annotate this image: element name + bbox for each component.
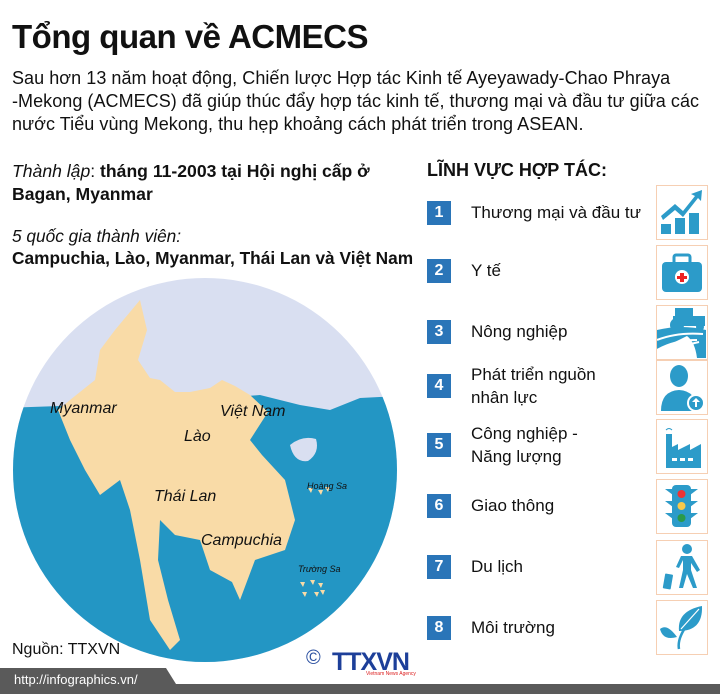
item 4 (427, 360, 708, 415)
item 2 (427, 245, 708, 300)
item 5: Công nghiệp - (471, 424, 578, 443)
logo (306, 647, 416, 677)
map: Hoàng Sa (307, 481, 347, 491)
item 1: 1 (435, 204, 443, 221)
item 8: 8 (435, 619, 443, 636)
item 1 (427, 185, 708, 240)
intro text (12, 68, 699, 134)
item 3 (427, 305, 708, 360)
source: Nguồn: TTXVN (12, 641, 120, 658)
item 6: Giao thông (471, 496, 554, 515)
item 3: 3 (435, 323, 443, 340)
intro text: nước Tiểu vùng Mekong, thu hẹp khoảng cách phát triển trong ASEAN. (12, 114, 584, 134)
map: Lào (184, 428, 211, 445)
item 5: Năng lượng (471, 447, 562, 466)
icon: traffic light (656, 479, 708, 534)
member countries: Campuchia, Lào, Myanmar, Thái Lan và Việt Nam (12, 248, 413, 268)
item 7: Du lịch (471, 557, 523, 576)
logo: Vietnam News Agency (366, 671, 416, 677)
item 8: Môi trường (471, 618, 555, 637)
icon: medical kit (656, 245, 708, 300)
member countries: 5 quốc gia thành viên: (12, 226, 181, 246)
map: Campuchia (201, 532, 282, 549)
logo: © (306, 647, 321, 669)
item 4: nhân lực (471, 388, 537, 407)
heading: cooperation fields: LĨNH VỰC HỢP TÁC: (427, 160, 607, 180)
footer bar: http://infographics.vn/ (14, 672, 138, 687)
icon: person (656, 360, 708, 415)
icon: leaf (656, 600, 708, 655)
founding info (12, 161, 370, 204)
icon: traveler (656, 540, 708, 595)
founding info: Bagan, Myanmar (12, 184, 153, 204)
icon: chart (656, 185, 708, 240)
map: Việt Nam (220, 403, 286, 420)
item 5 (427, 419, 708, 474)
intro text: -Mekong (ACMECS) đã giúp thúc đẩy hợp tác kinh tế, thương mại và đầu tư giữa các (12, 91, 699, 111)
item 6: 6 (435, 497, 443, 514)
map (13, 278, 397, 662)
item 2: 2 (435, 262, 443, 279)
item 7 (427, 540, 708, 595)
footer bar (0, 668, 720, 694)
title: Tổng quan về ACMECS (12, 18, 368, 55)
item 4: Phát triển nguồn (471, 365, 596, 384)
logo: TTXVN (332, 648, 409, 676)
item 2: Y tế (471, 261, 501, 280)
intro text: Sau hơn 13 năm hoạt động, Chiến lược Hợp tác Kinh tế Ayeyawady-Chao Phraya (12, 68, 670, 88)
item 8 (427, 600, 708, 655)
item 5: 5 (435, 436, 443, 453)
item 7: 7 (435, 558, 443, 575)
icon: farm (656, 305, 708, 360)
item 3: Nông nghiệp (471, 322, 567, 341)
item 6 (427, 479, 708, 534)
map: Trường Sa (298, 564, 340, 574)
map: Myanmar (50, 400, 117, 417)
item 1: Thương mại và đầu tư (471, 203, 641, 222)
item 4: 4 (435, 377, 443, 394)
founding info: Thành lập: tháng 11-2003 tại Hội nghị cấp ở (12, 161, 370, 181)
icon: factory (656, 419, 708, 474)
map: Thái Lan (154, 488, 216, 505)
member countries (12, 226, 413, 268)
